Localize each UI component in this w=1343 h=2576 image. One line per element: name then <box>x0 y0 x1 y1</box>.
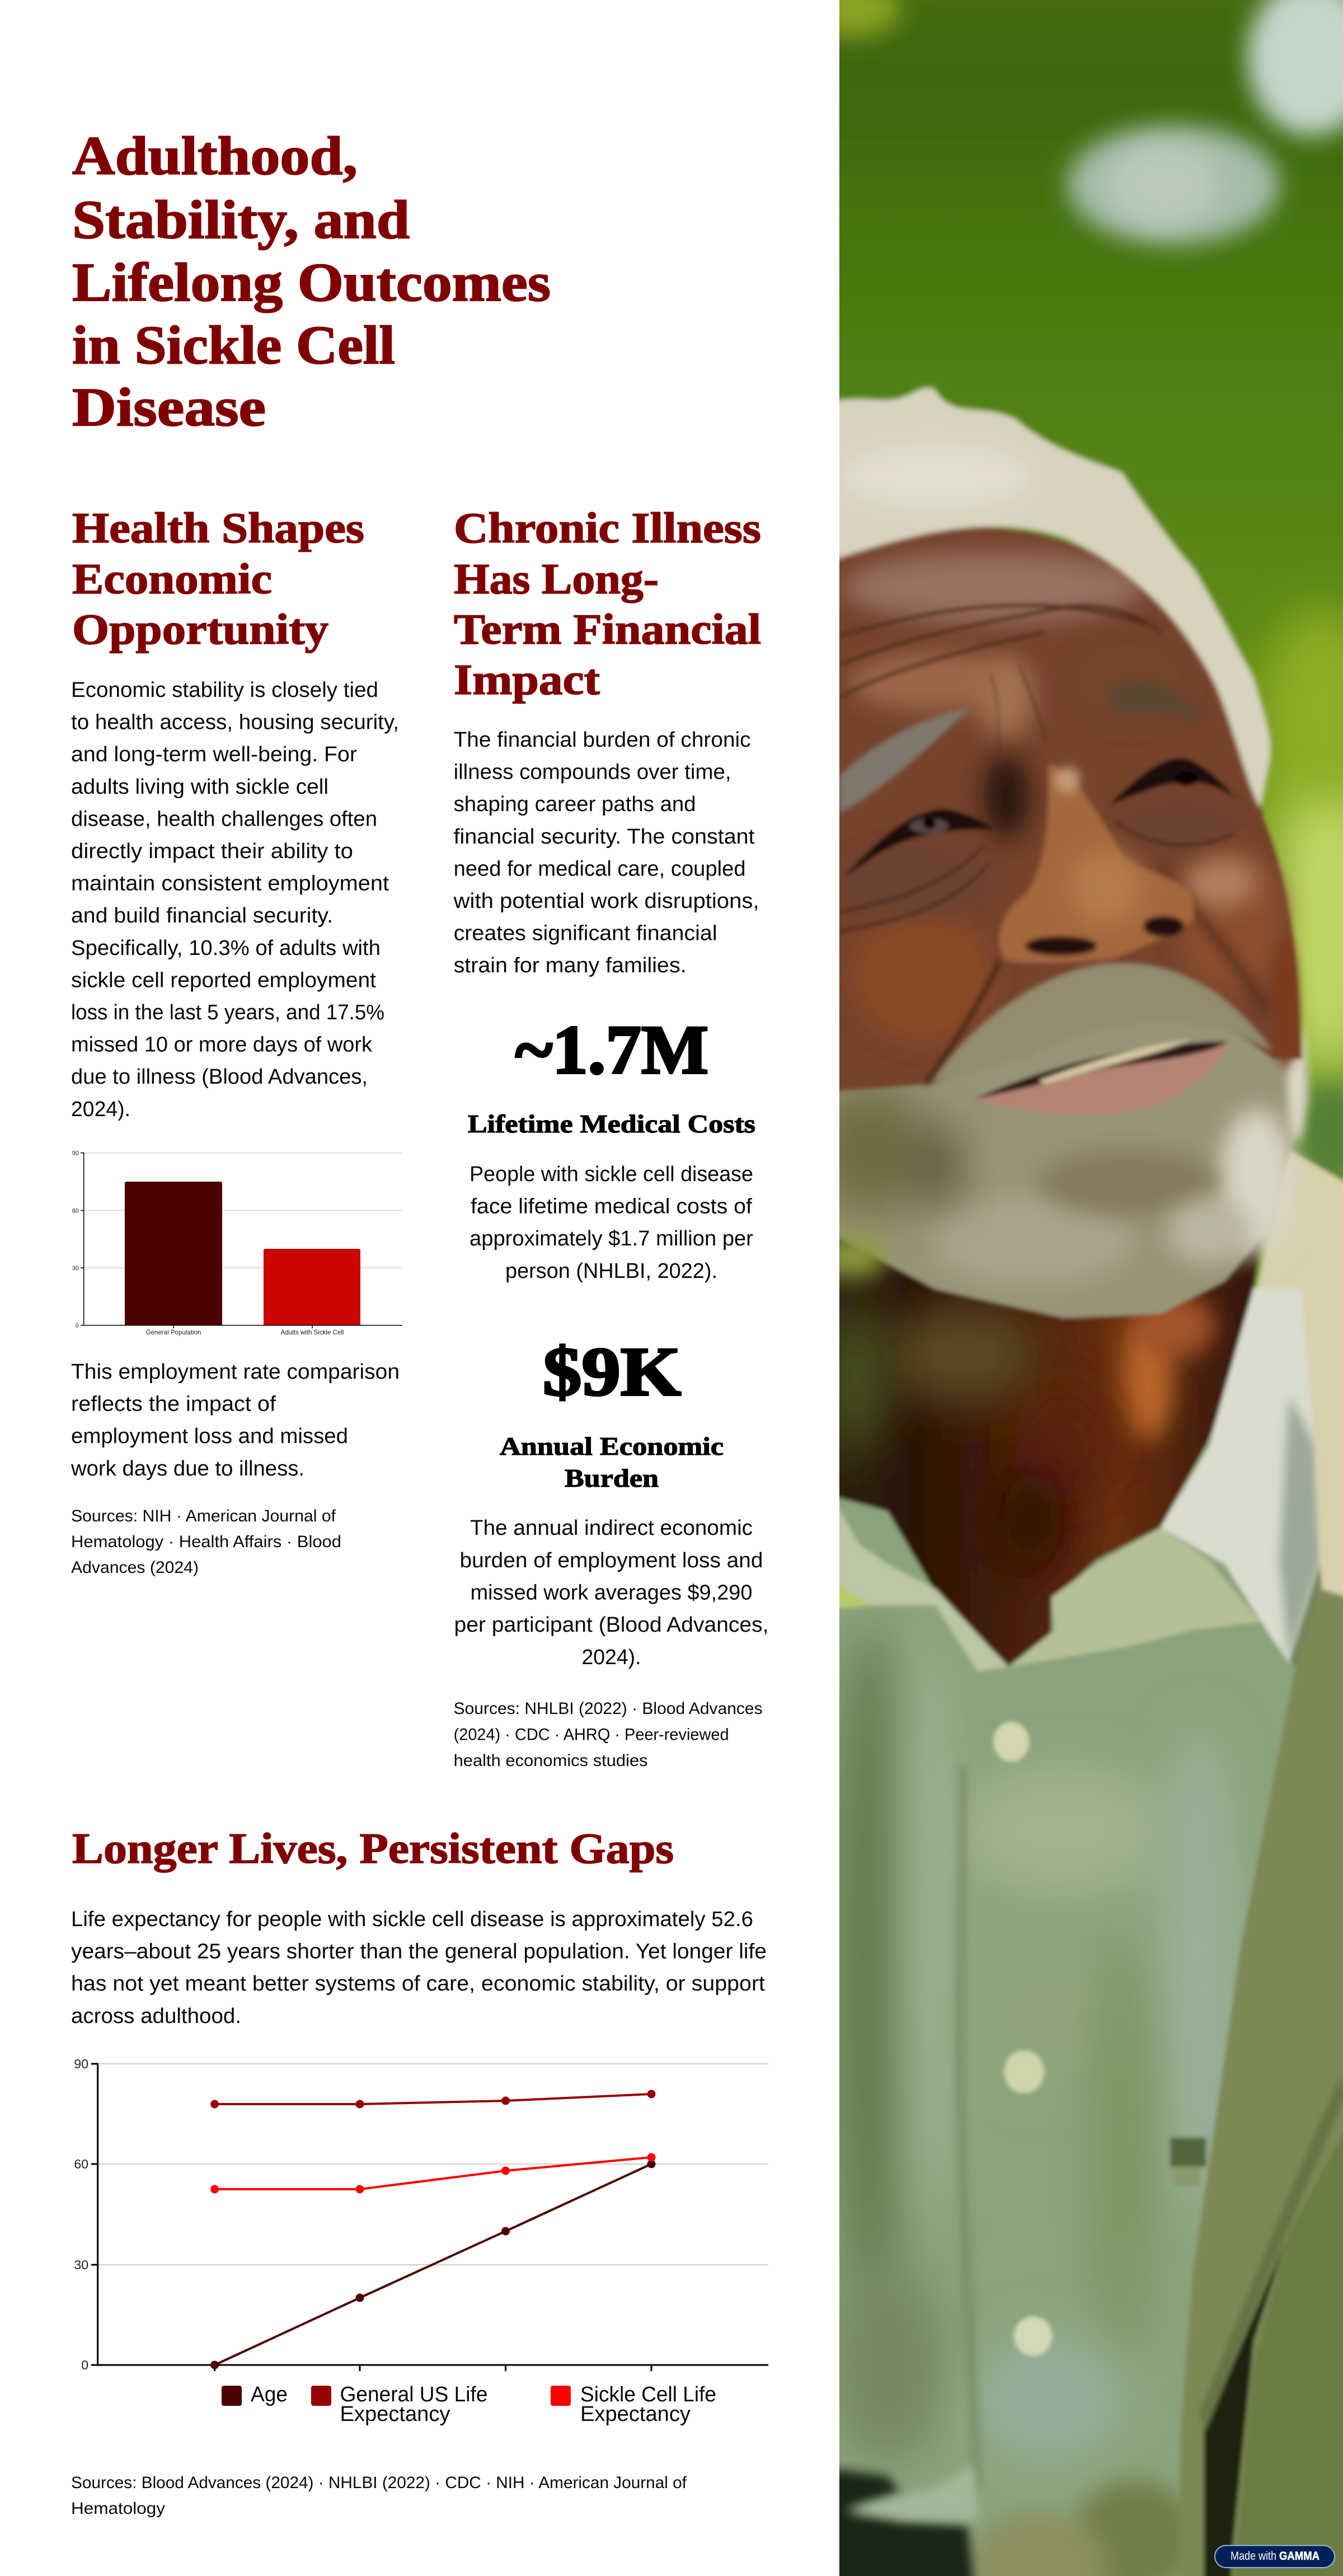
chart legend <box>222 2383 716 2426</box>
badge: made with gamma: GAMMA <box>1279 2550 1319 2563</box>
bar chart: employment rate: 60 <box>72 1208 79 1215</box>
moustache <box>931 963 1273 1084</box>
text block: economic stability: Specifically, 10.3% of adults with <box>71 936 381 960</box>
nose <box>999 764 1194 963</box>
sources: left column: Hematology · Health Affairs · Blood <box>71 1533 341 1551</box>
bar chart: employment rate: 30 <box>72 1265 79 1272</box>
sources: right column <box>454 1699 763 1770</box>
text block: economic stability: and build financial security. <box>71 904 333 928</box>
text block: economic stability: and long-term well-being. For <box>71 743 357 766</box>
text block: financial burden: financial security. The constant <box>454 825 755 849</box>
heading: chronic illness: Has Long- <box>454 555 659 603</box>
shirt buttons <box>994 1722 1029 1762</box>
heading: chronic illness: Chronic Illness <box>454 504 761 552</box>
bar chart: employment rate <box>72 1150 402 1336</box>
stat: lifetime medical costs <box>468 1011 755 1283</box>
stat: annual economic burden: The annual indirect economic <box>470 1516 753 1540</box>
heading: chronic illness: Impact <box>454 655 600 704</box>
forehead wrinkles <box>839 605 1161 751</box>
chart legend: Age <box>251 2383 288 2406</box>
text block: economic stability: adults living with sickle cell <box>71 775 328 799</box>
heading: chronic illness: Term Financial <box>454 605 761 653</box>
bar chart: employment rate: 90 <box>72 1150 79 1156</box>
line series: age <box>210 2160 656 2369</box>
bar chart: employment rate: General Population <box>145 1328 201 1336</box>
text block: employment comparison: This employment rate comparison <box>71 1360 400 1384</box>
eyebrows <box>839 708 971 813</box>
heading: health shapes economic opportunity <box>72 504 364 653</box>
text block: life expectancy: years–about 25 years shorter than the general population. Yet longer life <box>71 1940 767 1964</box>
text block: economic stability: 2024). <box>71 1098 130 1121</box>
stat: annual economic burden: 2024). <box>582 1646 641 1669</box>
text block: economic stability <box>71 678 399 1121</box>
bokeh highlights <box>1068 125 1279 244</box>
stat: lifetime medical costs: ~1.7M <box>515 1011 708 1088</box>
heading: health shapes economic opportunity: Economic <box>72 555 272 603</box>
text block: financial burden: with potential work disruptions, <box>453 889 759 913</box>
eyes <box>843 809 994 879</box>
badge: made with gamma: Made with <box>1231 2550 1276 2563</box>
text block: financial burden: strain for many families. <box>454 954 687 977</box>
stat: annual economic burden <box>454 1333 769 1669</box>
title: Stability, and <box>72 190 410 250</box>
sources: bottom <box>71 2474 687 2518</box>
stat: annual economic burden: missed work averages $9,290 <box>470 1581 752 1605</box>
line chart: life expectancy by age: 30 <box>74 2257 88 2272</box>
beard <box>827 957 1308 1318</box>
bar chart: employment rate: 0 <box>76 1322 79 1329</box>
chart legend: General US Life <box>340 2383 488 2406</box>
text block: economic stability: due to illness (Blood Advances, <box>71 1065 368 1089</box>
bar chart: employment rate: Adults with Sickle Cell <box>281 1328 344 1336</box>
text block: financial burden <box>453 728 759 977</box>
jacket <box>1180 1585 1343 2576</box>
heading: longer lives: Longer Lives, Persistent Gaps <box>72 1824 674 1872</box>
text block: economic stability: sickle cell reported employment <box>71 968 376 992</box>
sources: bottom: Sources: Blood Advances (2024) · NHLBI (2022) · CDC · NIH · American Journal of <box>71 2474 687 2492</box>
sources: left column <box>71 1507 341 1577</box>
white hair <box>827 387 1271 809</box>
heading: chronic illness <box>454 504 761 704</box>
neck <box>827 1191 1270 1667</box>
title: Lifelong Outcomes <box>72 252 551 313</box>
text block: economic stability: Economic stability is closely tied <box>71 678 378 702</box>
stat: annual economic burden: Annual Economic <box>500 1432 724 1460</box>
stat: annual economic burden: burden of employment loss and <box>460 1549 763 1572</box>
stat: lifetime medical costs: face lifetime medical costs of <box>471 1195 752 1219</box>
text block: financial burden: illness compounds over time, <box>454 761 731 784</box>
title: Adulthood, <box>72 126 358 186</box>
badge: made with gamma <box>1215 2546 1335 2568</box>
text block: financial burden: need for medical care, coupled <box>454 857 746 880</box>
heading: health shapes economic opportunity: Opportunity <box>72 605 328 653</box>
text block: financial burden: The financial burden of chronic <box>454 728 751 752</box>
stat: lifetime medical costs: approximately $1.7 million per <box>469 1227 753 1250</box>
title: Disease <box>72 377 266 438</box>
stat: annual economic burden: per participant (Blood Advances, <box>454 1613 769 1637</box>
text block: economic stability: to health access, housing security, <box>71 711 399 734</box>
text block: economic stability: directly impact their ability to <box>71 840 353 863</box>
stat: lifetime medical costs: person (NHLBI, 2022). <box>505 1259 717 1283</box>
shirt <box>827 1478 1295 2576</box>
line chart: life expectancy by age: 0 <box>81 2358 88 2372</box>
stat: lifetime medical costs: People with sickle cell disease <box>469 1163 753 1186</box>
mouth and smile <box>974 1041 1228 1116</box>
sources: right column: health economics studies <box>454 1751 648 1770</box>
text block: economic stability: disease, health challenges often <box>71 807 377 831</box>
text block: economic stability: maintain consistent employment <box>71 872 389 896</box>
text block: life expectancy: has not yet meant better systems of care, economic stability, or support <box>71 1972 765 1996</box>
page background <box>0 0 839 2576</box>
stat: annual economic burden: $9K <box>543 1333 681 1410</box>
collars <box>1008 1528 1260 1667</box>
text block: financial burden: creates significant financial <box>454 922 717 945</box>
title <box>72 126 551 438</box>
text block: life expectancy <box>71 1908 767 2028</box>
face skin <box>827 526 1302 1092</box>
text block: life expectancy: Life expectancy for people with sickle cell disease is approximately 52.6 <box>71 1908 753 1931</box>
sources: right column: Sources: NHLBI (2022) · Blood Advances <box>454 1699 763 1718</box>
chart legend: Expectancy <box>580 2402 691 2426</box>
text block: life expectancy: across adulthood. <box>71 2004 241 2028</box>
text block: employment comparison: work days due to illness. <box>71 1457 304 1481</box>
line series: general US life expectancy <box>210 2090 656 2108</box>
text block: economic stability: loss in the last 5 years, and 17.5% <box>71 1001 384 1024</box>
sources: right column: (2024) · CDC · AHRQ · Peer-reviewed <box>454 1725 729 1744</box>
line chart: life expectancy by age: 60 <box>74 2157 88 2171</box>
text block: financial burden: shaping career paths and <box>454 793 696 816</box>
line chart: life expectancy by age <box>74 2057 768 2372</box>
chart legend: Expectancy <box>340 2402 450 2426</box>
line chart: life expectancy by age: 90 <box>74 2057 88 2071</box>
heading: health shapes economic opportunity: Health Shapes <box>72 504 364 552</box>
line series: sickle cell life expectancy <box>210 2153 656 2193</box>
stat: annual economic burden: Burden <box>565 1464 659 1492</box>
text block: employment comparison: reflects the impact of <box>71 1393 276 1416</box>
photo: smiling older man in a green shirt against foliage <box>839 0 1343 2576</box>
sources: left column: Advances (2024) <box>71 1558 199 1577</box>
text block: economic stability: missed 10 or more days of work <box>71 1033 373 1057</box>
sources: left column: Sources: NIH · American Journal of <box>71 1507 336 1525</box>
text block: employment comparison <box>71 1360 400 1481</box>
sources: bottom: Hematology <box>71 2499 165 2518</box>
chart legend: Sickle Cell Life <box>580 2383 716 2406</box>
stat: lifetime medical costs: Lifetime Medical Costs <box>468 1109 755 1138</box>
text block: employment comparison: employment loss and missed <box>71 1425 348 1448</box>
title: in Sickle Cell <box>72 315 395 376</box>
